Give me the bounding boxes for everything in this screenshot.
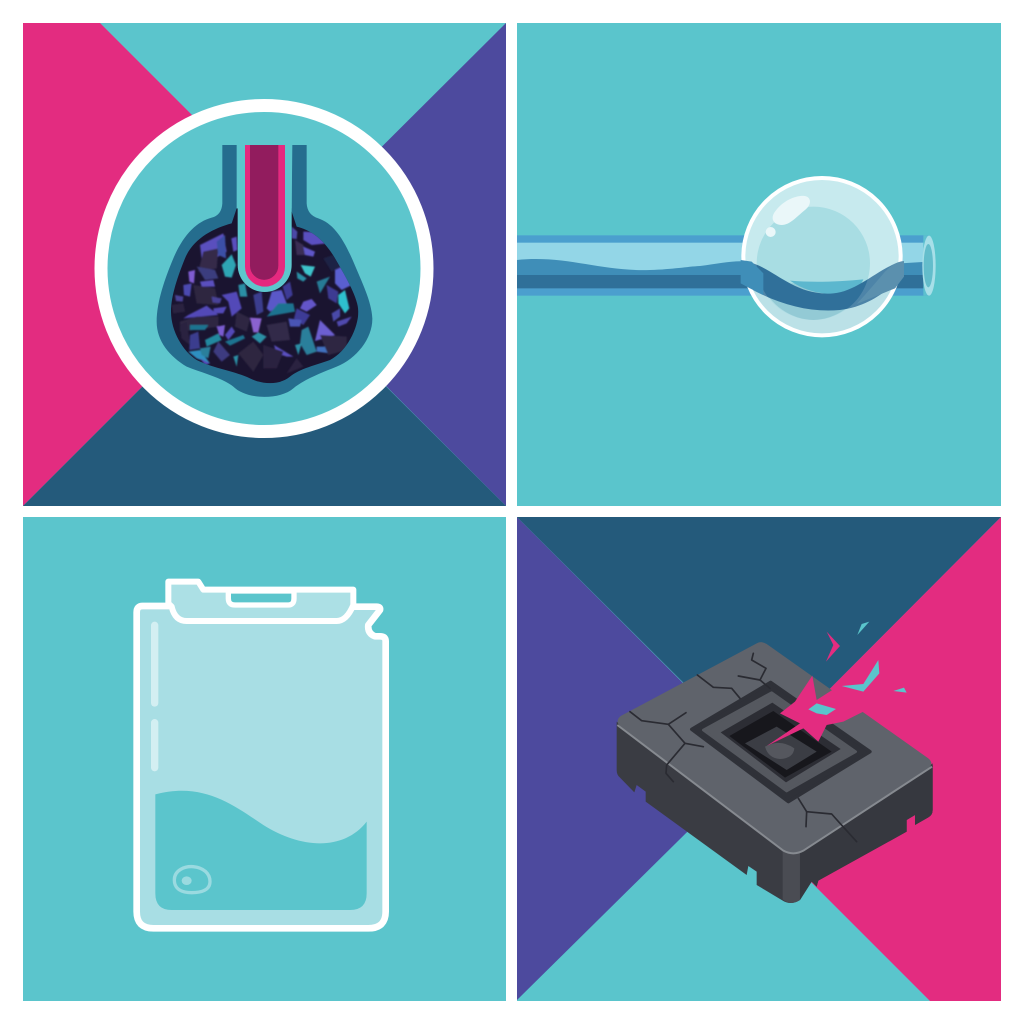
pink shard burst (767, 676, 863, 746)
flask wall (157, 145, 372, 397)
gravel fill (167, 205, 363, 388)
flask illustration (157, 145, 372, 397)
teal fragments (808, 622, 907, 715)
liquid (155, 791, 367, 910)
panel: storage card outline (23, 517, 506, 1001)
chip top face (618, 642, 931, 853)
card clip (168, 582, 353, 621)
tube (238, 145, 292, 292)
bubble highlights (773, 196, 810, 225)
panel: glass tube with bubble (517, 23, 1001, 506)
bubble (740, 178, 904, 340)
panel: cracked chip with shards (517, 517, 1001, 1001)
pink fragment (826, 632, 840, 662)
tube open end (922, 236, 936, 296)
recessed socket (692, 682, 870, 802)
cracks (630, 653, 857, 842)
small bubble icon (174, 867, 210, 893)
card body (137, 606, 386, 928)
chip sides (617, 722, 933, 903)
highlight strokes (151, 622, 158, 771)
white circle badge (101, 106, 427, 432)
tube (517, 235, 930, 296)
panel: gravel flask with inserted tube (23, 23, 506, 506)
